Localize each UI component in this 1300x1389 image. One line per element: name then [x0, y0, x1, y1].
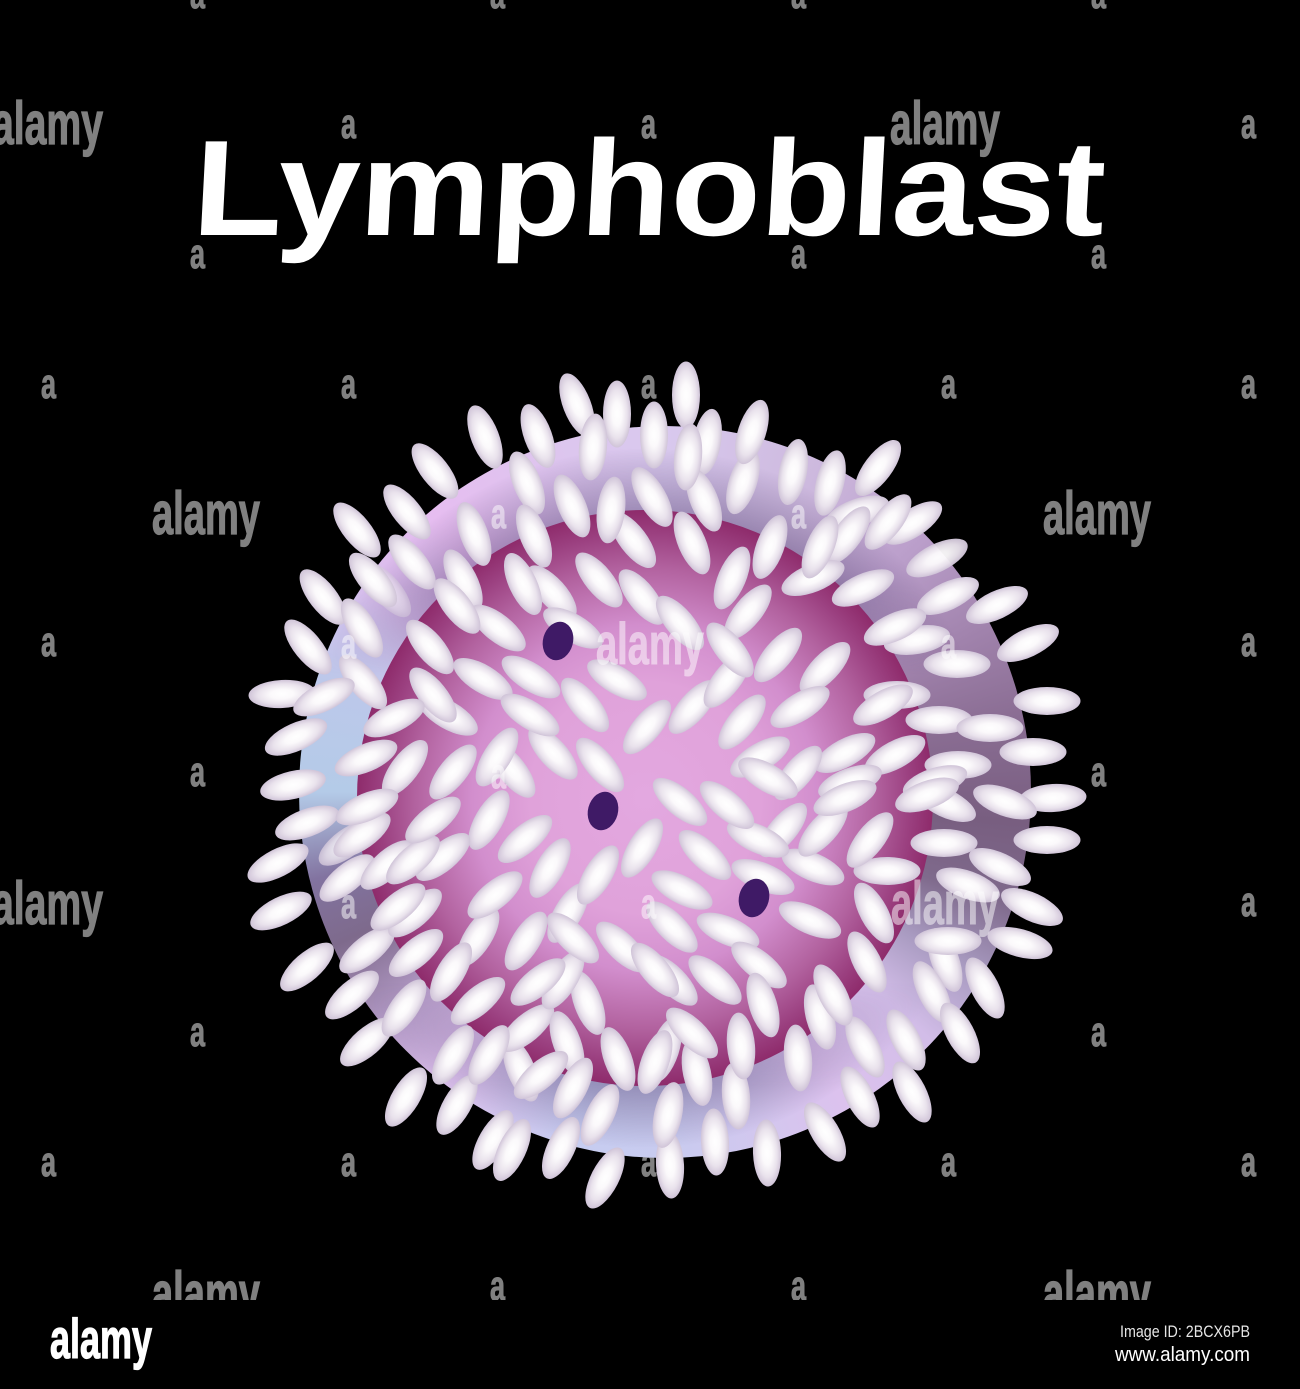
- watermark background layer: a: [941, 1138, 956, 1185]
- watermark background layer: a: [41, 618, 56, 665]
- watermarks over the cell: a: [491, 750, 506, 797]
- image id and site text: Image ID: 2BCX6PB: [1120, 1322, 1250, 1341]
- watermark background layer: a: [1241, 878, 1256, 925]
- alamy logo: alamy: [50, 1307, 152, 1370]
- watermarks over the cell: a: [641, 880, 656, 927]
- watermark background layer: a: [1091, 230, 1106, 277]
- grains: [242, 362, 1087, 1214]
- watermark background layer: a: [41, 360, 56, 407]
- watermark background layer: alamy: [890, 90, 1000, 157]
- lymphoblast cell illustration: [248, 362, 1086, 1208]
- watermark background layer: a: [1241, 360, 1256, 407]
- watermark background layer: a: [791, 230, 806, 277]
- watermark background layer: a: [641, 100, 656, 147]
- watermarks over the cell: [341, 490, 999, 937]
- title: Lymphoblast: [189, 112, 1109, 264]
- watermark background layer: alamy: [1043, 1260, 1151, 1327]
- watermark background layer: a: [941, 360, 956, 407]
- watermark background layer: a: [490, 1262, 505, 1309]
- watermark background layer: a: [341, 1138, 356, 1185]
- watermark background layer: alamy: [152, 480, 260, 547]
- watermarks over the cell: a: [791, 490, 806, 537]
- watermark background layer: a: [641, 1138, 656, 1185]
- watermark background layer: a: [190, 1008, 205, 1055]
- watermark background layer: a: [190, 230, 205, 277]
- watermark background layer: a: [1241, 100, 1256, 147]
- watermark background layer: a: [1241, 618, 1256, 665]
- watermark background layer: a: [1091, 748, 1106, 795]
- watermark background layer: a: [190, 748, 205, 795]
- watermark background layer: a: [41, 1138, 56, 1185]
- watermarks over the cell: a: [941, 620, 956, 667]
- ring inner shading: [360, 456, 924, 1140]
- watermark background layer: a: [341, 360, 356, 407]
- watermarks over the cell: a: [491, 490, 506, 537]
- watermark background layer: a: [341, 100, 356, 147]
- outer cell membrane ring: [299, 426, 1031, 1158]
- image id and site text: www.alamy.com: [1114, 1344, 1250, 1366]
- watermark background layer: a: [1091, 1008, 1106, 1055]
- watermarks over the cell: alamy: [596, 612, 704, 677]
- cytoplasm / nucleus disc: [357, 510, 933, 1086]
- watermarks over the cell: a: [341, 880, 356, 927]
- watermark background layer: a: [791, 1262, 806, 1309]
- watermark background layer: alamy: [1043, 480, 1151, 547]
- dark nucleolus dots: [538, 618, 774, 921]
- watermark background layer: a: [1241, 1138, 1256, 1185]
- watermarks over the cell: a: [341, 620, 356, 667]
- watermarks over the cell: alamy: [891, 870, 999, 937]
- watermark background layer: a: [641, 360, 656, 407]
- watermark background layer: alamy: [152, 1260, 260, 1327]
